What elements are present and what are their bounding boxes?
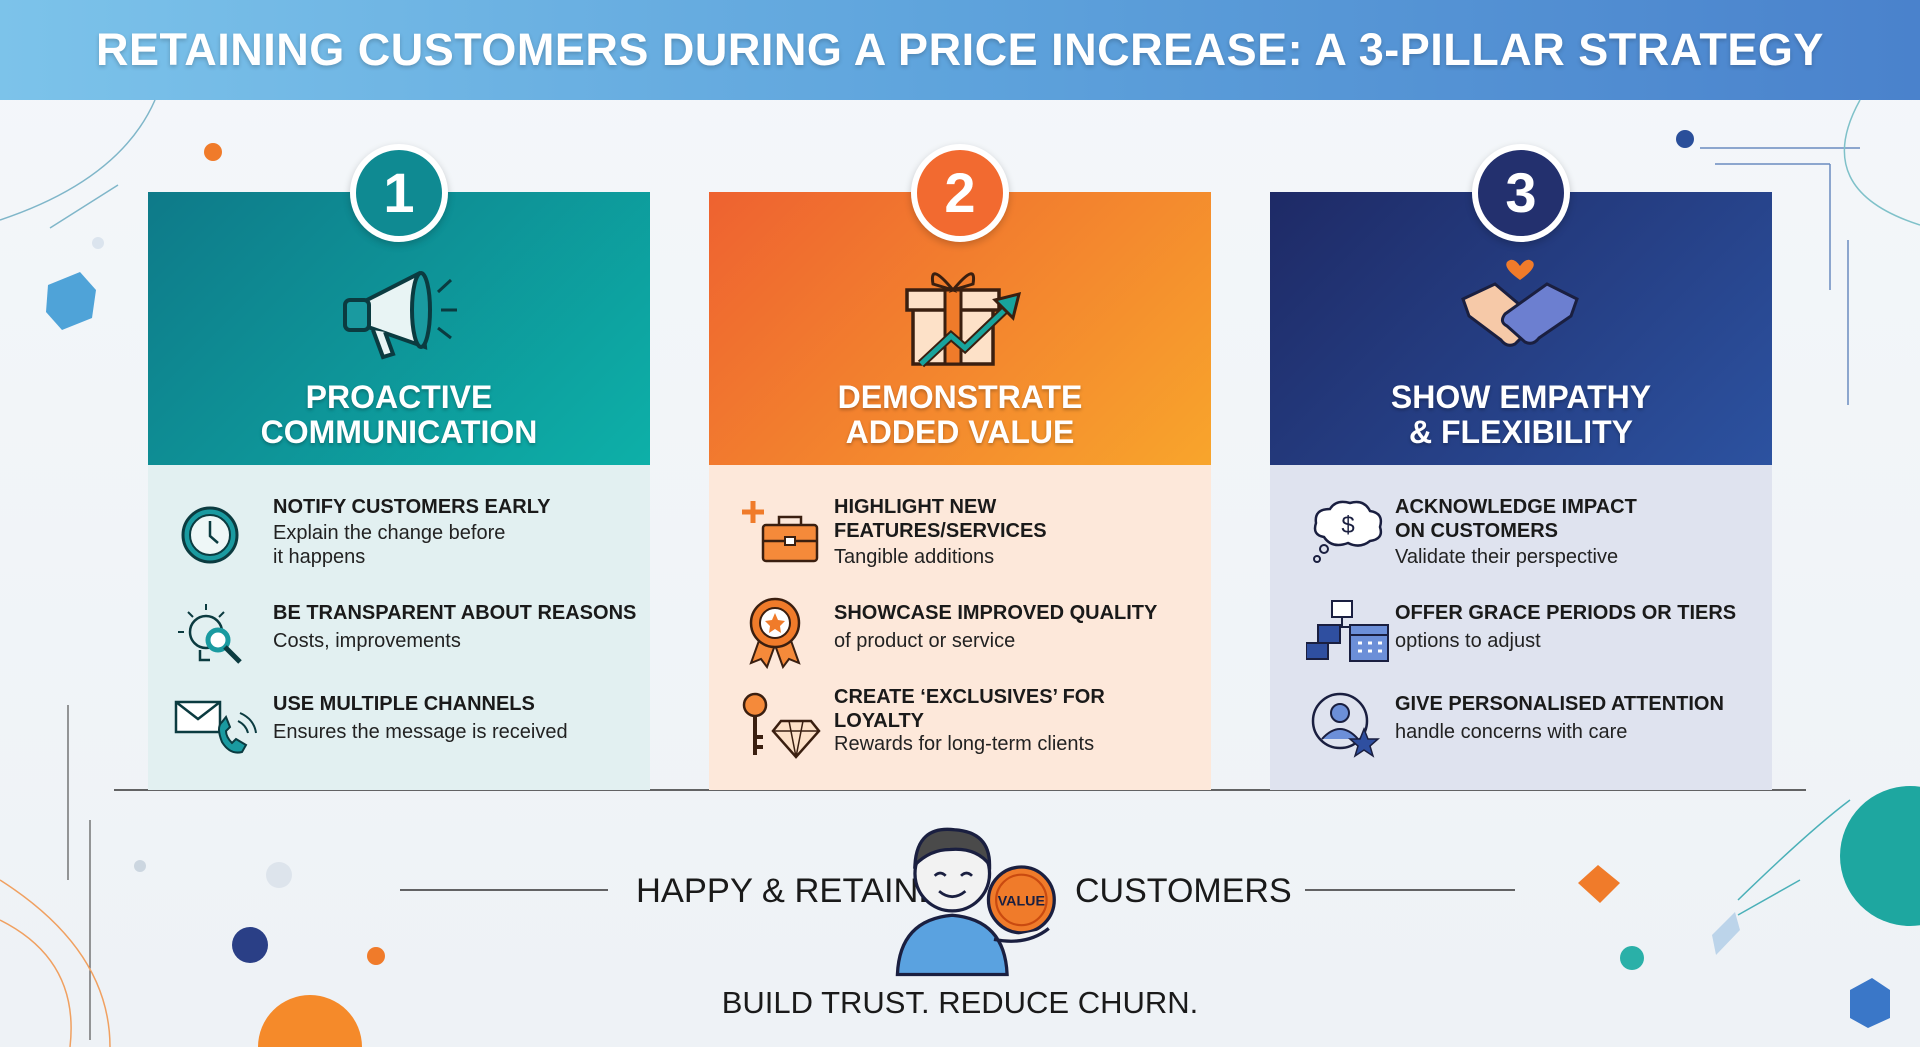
number badge 3 xyxy=(1472,144,1570,242)
panel: proactive communication: BE TRANSPARENT ABOUT REASONS xyxy=(273,602,636,624)
panel: demonstrate added value: FEATURES/SERVICES xyxy=(834,520,1047,542)
panel: demonstrate added value: of product or service xyxy=(834,630,1015,652)
item: acknowledge xyxy=(1313,496,1637,568)
footer: happy customers: CUSTOMERS xyxy=(1075,872,1292,910)
icon: megaphone xyxy=(343,271,457,360)
heading: ADDED VALUE xyxy=(846,414,1074,450)
item: quality xyxy=(749,598,1157,669)
title: RETAINING CUSTOMERS DURING A PRICE INCREASE: A 3-PILLAR STRATEGY xyxy=(96,24,1824,75)
icon: handshake with heart xyxy=(1461,260,1579,347)
panel: show empathy & flexibility: $ xyxy=(1341,512,1355,539)
number badge 2 xyxy=(911,144,1009,242)
heading: COMMUNICATION xyxy=(261,414,537,450)
item: exclusives xyxy=(742,686,1105,759)
heading xyxy=(838,379,1082,450)
panel: proactive communication: Explain the change before xyxy=(273,522,505,544)
panel: proactive communication: USE MULTIPLE CHANNELS xyxy=(273,693,535,715)
icon: gift with arrow xyxy=(905,272,1021,368)
heading: DEMONSTRATE xyxy=(838,379,1082,415)
item: channels xyxy=(174,693,568,754)
footer: happy customers: HAPPY & RETAINE xyxy=(636,872,941,910)
icon: smiling person with value coin: VALUE xyxy=(998,893,1045,909)
panel: proactive communication: it happens xyxy=(273,546,365,568)
panel: show empathy & flexibility: OFFER GRACE PERIODS OR TIERS xyxy=(1395,602,1736,624)
panel: show empathy & flexibility: ON CUSTOMERS xyxy=(1395,520,1558,542)
tagline: BUILD TRUST. REDUCE CHURN. xyxy=(722,985,1198,1020)
item: transparent xyxy=(178,602,636,664)
item: new features xyxy=(742,496,1047,568)
panel: show empathy & flexibility: Validate their perspective xyxy=(1395,546,1618,568)
panel: demonstrate added value: CREATE ‘EXCLUSIVES’ FOR xyxy=(834,686,1105,708)
panel: demonstrate added value: SHOWCASE IMPROVED QUALITY xyxy=(834,602,1157,624)
panel: proactive communication: Costs, improvements xyxy=(273,630,461,652)
panel: show empathy & flexibility: ACKNOWLEDGE IMPACT xyxy=(1395,496,1637,518)
panel: proactive communication: Ensures the message is received xyxy=(273,721,568,743)
panel: show empathy & flexibility: GIVE PERSONALISED ATTENTION xyxy=(1395,693,1724,715)
heading xyxy=(1391,379,1651,450)
icon: smiling person with value coin xyxy=(896,828,1056,976)
number badge 1 xyxy=(350,144,448,242)
number badge 1: 1 xyxy=(383,161,415,224)
panel: demonstrate added value: Tangible additions xyxy=(834,546,994,568)
title xyxy=(0,0,1920,100)
panel: show empathy & flexibility xyxy=(1270,144,1772,790)
item: personalised xyxy=(1312,692,1724,758)
panel: proactive communication xyxy=(148,144,650,790)
panel: demonstrate added value: HIGHLIGHT NEW xyxy=(834,496,996,518)
panel: demonstrate added value: Rewards for long-term clients xyxy=(834,733,1094,755)
heading: SHOW EMPATHY xyxy=(1391,379,1651,415)
panel: demonstrate added value: LOYALTY xyxy=(834,710,924,732)
heading: PROACTIVE xyxy=(306,379,492,415)
heading xyxy=(260,379,537,450)
panel: demonstrate added value xyxy=(709,144,1211,790)
item: notify xyxy=(182,496,550,568)
panel: show empathy & flexibility: handle concerns with care xyxy=(1395,721,1627,743)
number badge 2: 2 xyxy=(944,161,976,224)
panel: show empathy & flexibility: options to adjust xyxy=(1395,630,1541,652)
footer: happy customers xyxy=(636,828,1292,976)
number badge 3: 3 xyxy=(1505,161,1537,224)
heading: & FLEXIBILITY xyxy=(1409,414,1633,450)
item: grace periods xyxy=(1306,600,1736,662)
panel: proactive communication: NOTIFY CUSTOMERS EARLY xyxy=(273,496,550,518)
